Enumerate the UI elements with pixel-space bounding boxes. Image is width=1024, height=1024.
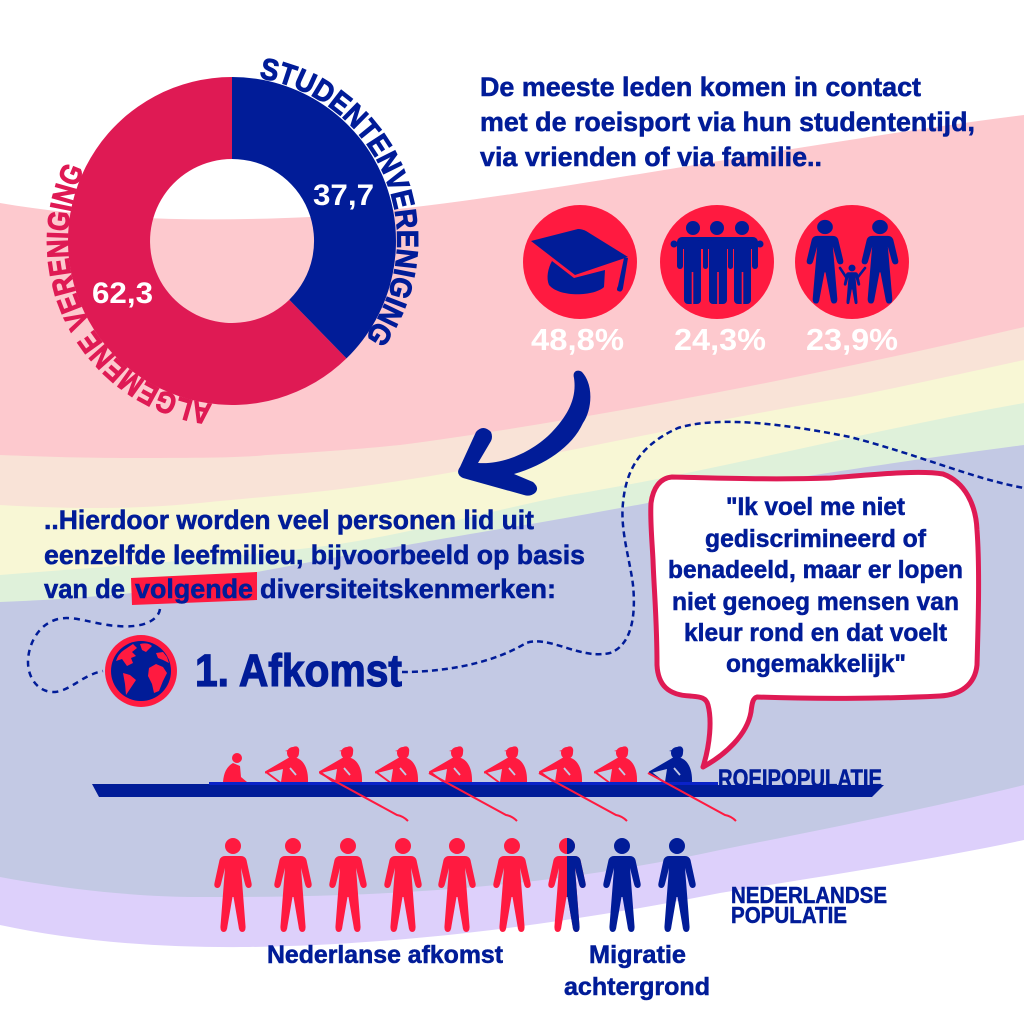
percentage labels: 24,3% <box>674 322 766 357</box>
paragraph: leefmilieu <box>44 505 585 605</box>
paragraph: leefmilieu: volgende <box>135 574 253 604</box>
paragraph: leefmilieu: ..Hierdoor worden veel personen lid uit <box>44 505 534 535</box>
heading: contact with rowing <box>480 72 975 172</box>
hull <box>92 784 884 797</box>
paragraph: leefmilieu: eenzelfde leefmilieu, bijvoorbeeld op basis <box>44 540 585 570</box>
background: peach wave band <box>0 327 1024 1024</box>
quote text: kleur rond en dat voelt <box>684 619 948 647</box>
donut segment: algemene vereniging 62,3 <box>68 77 346 405</box>
heading: 1. Afkomst: 1. Afkomst <box>195 645 402 696</box>
quote text: "Ik voel me niet <box>726 493 906 521</box>
icon: graduation cap <box>523 205 637 319</box>
paragraph: leefmilieu: van de <box>44 574 125 604</box>
rowing boat with crew <box>92 746 884 821</box>
label: Migratie achtergrond: achtergrond <box>564 973 710 1001</box>
label: Nederlanse afkomst: Nederlanse afkomst <box>267 941 504 969</box>
curved label: studentenvereniging: STUDENTENVERENIGING <box>260 58 418 346</box>
cox <box>223 753 247 782</box>
red figures: Nederlandse afkomst <box>214 838 586 932</box>
dashed line: highlight to globe <box>28 609 160 692</box>
half figure overlay <box>567 838 586 932</box>
quote text <box>668 493 963 678</box>
quote text: niet genoeg mensen van <box>672 588 959 616</box>
label: Nederlandse populatie: POPULATIE <box>731 902 847 928</box>
background: blue-grey wave band <box>0 445 1024 1024</box>
percentage labels <box>531 322 898 357</box>
quote text: ongemakkelijk" <box>726 650 906 678</box>
background: yellow wave band <box>0 360 1024 1024</box>
highlight: volgende <box>131 572 257 605</box>
icon: globe <box>105 635 177 707</box>
arrow: curved down-left <box>458 371 590 496</box>
blue rower <box>649 746 692 782</box>
oars <box>320 773 736 821</box>
label: Migratie achtergrond <box>564 941 710 1001</box>
donut segment: studentenvereniging 37,7 <box>232 77 396 358</box>
label: Migratie achtergrond: Migratie <box>589 941 686 969</box>
icon: family with child <box>795 205 909 319</box>
speech bubble <box>651 472 979 767</box>
heading: contact with rowing: De meeste leden komen in contact <box>480 72 921 102</box>
label: Nederlandse populatie <box>731 882 887 928</box>
curved label: algemene vereniging: ALGEMENE VERENIGING <box>46 164 212 424</box>
paragraph: leefmilieu: diversiteitskenmerken: <box>260 574 556 604</box>
value: 62,3: 62,3 <box>92 277 153 310</box>
icon: three friends <box>660 205 774 319</box>
dashed line: afkomst to right edge <box>402 422 1024 672</box>
population pictogram row <box>214 838 696 932</box>
value: 37,7: 37,7 <box>313 179 374 212</box>
background: green wave band <box>0 403 1024 1024</box>
background: purple wave band <box>0 785 1024 1024</box>
quote text: gediscrimineerd of <box>705 525 927 553</box>
percentage labels: 23,9% <box>806 322 898 357</box>
heading: contact with rowing: met de roeisport via hun studententijd, <box>480 107 975 137</box>
blue figures: migratie achtergrond <box>603 838 696 932</box>
donut chart <box>46 58 418 424</box>
red rowers <box>265 746 637 782</box>
label: roeipopulatie: ROEIPOPULATIE <box>718 765 882 793</box>
label: Nederlandse populatie: NEDERLANDSE <box>731 882 887 908</box>
percentage labels: 48,8% <box>531 322 624 357</box>
heading: contact with rowing: via vrienden of via familie.. <box>480 142 822 172</box>
quote text: benadeeld, maar er lopen <box>668 556 963 584</box>
background: white bottom <box>0 840 1024 1024</box>
